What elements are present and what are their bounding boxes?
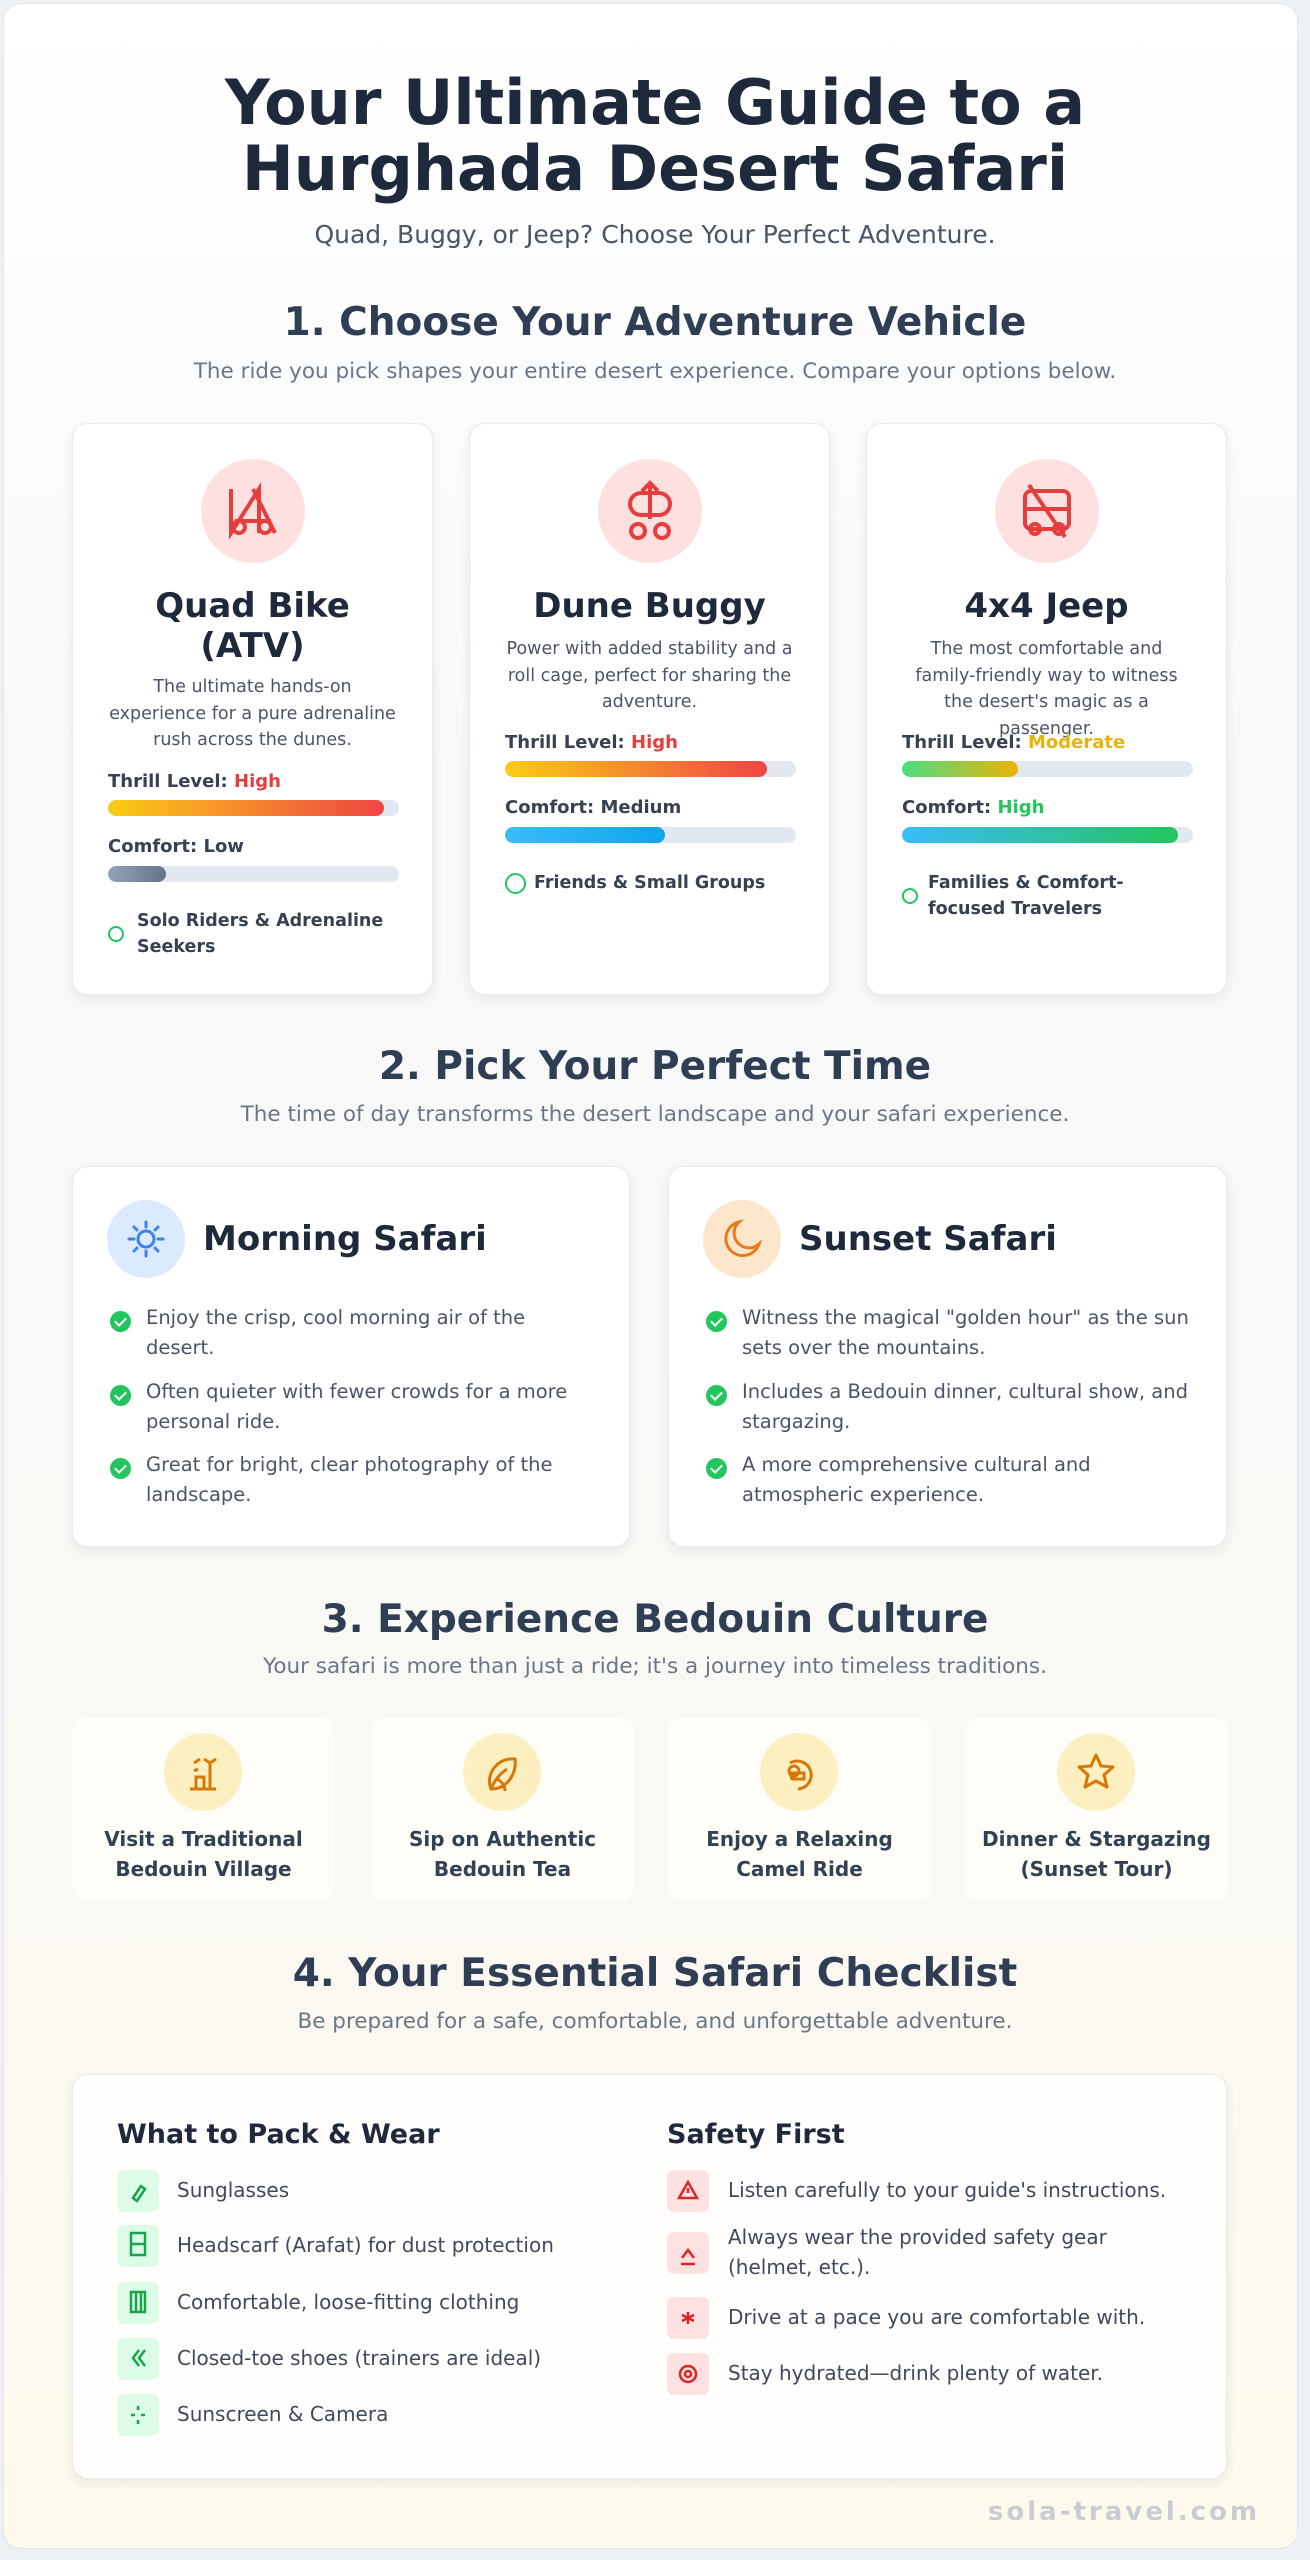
section 3 subtitle: Your safari is more than just a ride; it's a journey into timeless traditions. <box>263 1654 1047 1679</box>
label: Enjoy a Relaxing <box>706 1827 893 1851</box>
comfort label: Comfort: Low <box>108 836 244 857</box>
comfort bar <box>505 827 796 843</box>
panel: checklist <box>72 2074 1227 2479</box>
pack list: Comfortable, loose-fitting clothing <box>177 2290 519 2314</box>
pack list: Closed-toe shoes (trainers are ideal) <box>177 2346 541 2370</box>
vehicle title: 4x4 Jeep <box>964 586 1129 626</box>
heading: section 2: 2. Pick Your Perfect Time <box>379 1044 931 1089</box>
label: Sip on Authentic <box>409 1827 596 1851</box>
card title: Sunset Safari <box>799 1219 1057 1259</box>
label: Visit a Traditional <box>104 1827 303 1851</box>
icon: moon <box>703 1200 781 1278</box>
icon: jeep <box>995 459 1099 563</box>
panel: stargazing <box>965 1718 1228 1901</box>
thrill label: Thrill Level: High <box>505 732 678 753</box>
pack list: Sunglasses <box>177 2178 289 2202</box>
icon: village <box>164 1733 242 1811</box>
label: (Sunset Tour) <box>1020 1857 1172 1881</box>
bullet list: Witness the magical "golden hour" as the sun sets over the mountains. <box>742 1306 1189 1359</box>
safety list: Always wear the provided safety gear <box>728 2225 1107 2249</box>
subtitle: Quad, Buggy, or Jeep? Choose Your Perfect Adventure. <box>314 220 996 249</box>
pack list: Sunscreen & Camera <box>177 2402 388 2426</box>
label <box>706 1827 893 1881</box>
description: The ultimate hands-on experience for a pure adrenaline rush across the dunes. <box>109 677 396 750</box>
vehicle title <box>155 586 350 666</box>
heading: section 4: 4. Your Essential Safari Checklist <box>293 1951 1017 1996</box>
thrill bar <box>505 761 796 777</box>
heading: section 3: 3. Experience Bedouin Culture <box>322 1597 988 1642</box>
label: Bedouin Tea <box>434 1857 571 1881</box>
safety list: Drive at a pace you are comfortable with. <box>728 2305 1145 2329</box>
icon: camel <box>760 1733 838 1811</box>
card title: Morning Safari <box>203 1219 487 1259</box>
bullet list: Includes a Bedouin dinner, cultural show, and stargazing. <box>742 1380 1188 1433</box>
comfort bar <box>108 866 399 882</box>
title: Hurghada Desert Safari <box>242 132 1068 205</box>
comfort label: Comfort: Medium <box>505 797 681 818</box>
description: Power with added stability and a roll cage, perfect for sharing the adventure. <box>507 639 792 712</box>
panel: dune buggy <box>469 423 830 995</box>
icon: quad <box>201 459 305 563</box>
vehicle title: Quad Bike <box>155 586 350 626</box>
bullet list: Often quieter with fewer crowds for a more personal ride. <box>146 1380 567 1433</box>
vehicle title: Dune Buggy <box>533 586 766 626</box>
best for: Friends & Small Groups <box>534 873 765 893</box>
panel: tea <box>371 1718 634 1901</box>
description: The most comfortable and family-friendly way to witness the desert's magic as a passenger. <box>915 639 1178 738</box>
best for: Seekers <box>137 937 215 957</box>
safety list <box>667 2170 1166 2395</box>
label <box>104 1827 303 1881</box>
thrill bar <box>902 761 1193 777</box>
panel: morning safari <box>72 1166 630 1547</box>
best for: Solo Riders & Adrenaline <box>137 911 383 931</box>
title: Your Ultimate Guide to a <box>225 66 1085 139</box>
heading: section 1: 1. Choose Your Adventure Vehicle <box>284 300 1026 345</box>
panel: quad bike <box>72 423 433 995</box>
icon: star <box>1057 1733 1135 1811</box>
footer: brand: sola-travel.com <box>988 2497 1260 2527</box>
bullet list: Great for bright, clear photography of the landscape. <box>146 1453 552 1506</box>
label <box>982 1827 1211 1881</box>
panel: jeep <box>866 423 1227 995</box>
icon: sun <box>107 1200 185 1278</box>
label: Dinner & Stargazing <box>982 1827 1211 1851</box>
label: Bedouin Village <box>115 1857 292 1881</box>
panel: sunset safari <box>668 1166 1227 1547</box>
safety list: Listen carefully to your guide's instructions. <box>728 2178 1166 2202</box>
panel: camel <box>668 1718 931 1901</box>
pack list <box>117 2170 554 2436</box>
thrill bar <box>108 800 399 816</box>
icon: tea leaf <box>463 1733 541 1811</box>
best for: Families & Comfort- <box>928 873 1124 893</box>
icon: check <box>108 926 124 942</box>
bullet list: Enjoy the crisp, cool morning air of the desert. <box>146 1306 525 1359</box>
comfort label: Comfort: High <box>902 797 1044 818</box>
label <box>409 1827 596 1881</box>
section 1 subtitle: The ride you pick shapes your entire desert experience. Compare your options below. <box>194 359 1116 384</box>
pack list: Headscarf (Arafat) for dust protection <box>177 2233 554 2257</box>
safety list: Stay hydrated—drink plenty of water. <box>728 2361 1103 2385</box>
title <box>224 66 1085 205</box>
best for: focused Travelers <box>928 899 1102 919</box>
heading: pack: What to Pack & Wear <box>117 2119 440 2150</box>
panel: village <box>72 1718 335 1901</box>
heading: safety: Safety First <box>667 2119 845 2150</box>
thrill label: Thrill Level: High <box>108 771 281 792</box>
icon: check <box>902 888 918 904</box>
vehicle title: (ATV) <box>200 626 305 666</box>
bullet list <box>110 1306 567 1506</box>
best for <box>137 911 383 957</box>
bullet list <box>706 1306 1189 1506</box>
label: Camel Ride <box>736 1857 863 1881</box>
section 2 subtitle: The time of day transforms the desert landscape and your safari experience. <box>241 1102 1069 1127</box>
bullet list: A more comprehensive cultural and atmospheric experience. <box>742 1453 1091 1506</box>
comfort bar <box>902 827 1193 843</box>
safety list: (helmet, etc.). <box>728 2255 870 2279</box>
best for <box>928 873 1124 919</box>
thrill label: Thrill Level: Moderate <box>902 732 1125 753</box>
icon: check <box>505 873 526 894</box>
icon: buggy <box>598 459 702 563</box>
section 4 subtitle: Be prepared for a safe, comfortable, and unforgettable adventure. <box>297 2009 1012 2034</box>
